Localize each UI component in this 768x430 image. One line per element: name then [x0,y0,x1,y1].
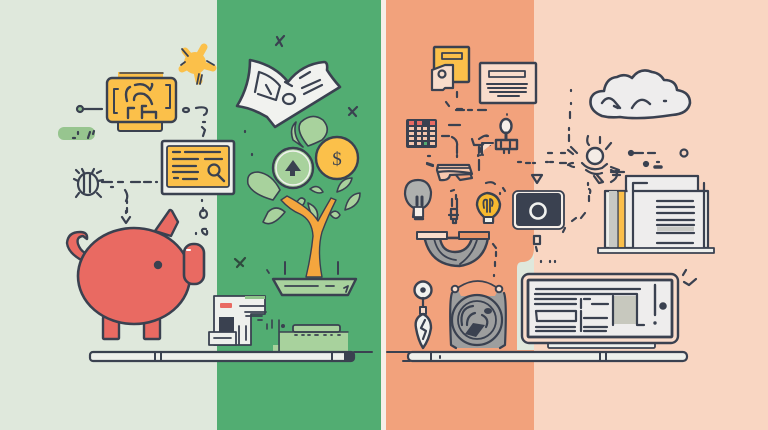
panel: green background [217,0,381,430]
connectors below camera [534,236,555,262]
tree trunk [281,196,336,277]
icon: sparkles on green [235,36,357,267]
icon: printer machine [209,296,266,345]
yellow coin [316,137,358,179]
dotted connectors upper left [102,107,207,212]
panel: orange background [386,0,534,430]
icon: connector plug [449,190,458,223]
icon: robot figure [478,114,517,155]
icon: calendar [406,119,437,148]
green coin [273,148,313,188]
panel: white divider [381,0,386,430]
yellow coin: $ [332,149,342,170]
panel: pale green background [0,0,217,430]
right shelf [387,352,687,361]
icon: check sparks [683,270,696,285]
left shelf [90,352,372,361]
icon: green box [267,320,348,352]
panel: pale peach background [534,0,768,430]
icon: yellow sun [181,47,214,84]
icon: search card [162,141,234,194]
icon: green blob [58,127,95,140]
icon: pendant [414,282,432,348]
dashed connector above drive [493,244,496,276]
tree [248,116,360,277]
icon: piggy bank [67,210,204,339]
file stack shelf [598,248,714,253]
icon: beetle [74,169,103,197]
icon: gray light bulb [405,180,431,219]
icon: yellow folder document [432,47,469,90]
icon: yellow gadget [107,72,176,131]
icon: plant pot [267,262,356,295]
arrow: down to piggy bank [122,201,130,223]
icon: open book [237,60,340,127]
icon: cloud [590,70,690,118]
icon: connector pin [77,106,102,112]
icon: tablet [522,274,678,348]
dashed connectors upper orange [427,92,566,170]
icon: hard drive [450,281,506,348]
icon: coins dots [196,210,207,235]
icon: text card [480,63,536,103]
icon: file stack [605,175,708,248]
icon: horseshoe bowl [417,232,489,266]
icon: gear sun with dashed lines [548,90,688,232]
icon: glasses bracket [437,165,472,180]
leaf cluster: tree leaves [248,116,360,224]
icon: camera tile [513,175,564,229]
icon: yellow light bulb [477,182,505,223]
